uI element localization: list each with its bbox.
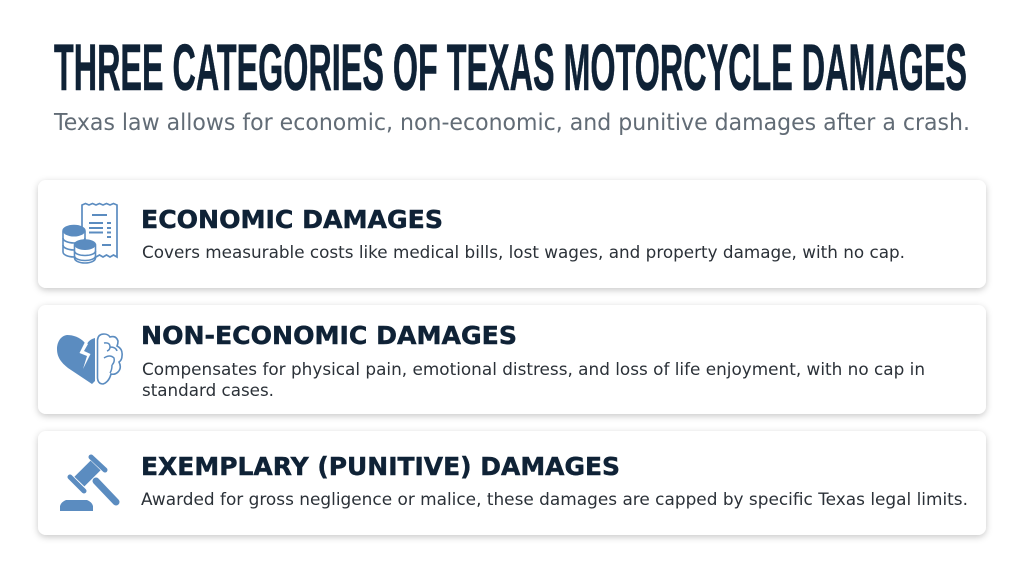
- subtitle: Texas law allows for economic, non-economic, and punitive damages after a crash.: [53, 108, 970, 136]
- panel: exemplary damages: [38, 431, 986, 535]
- text: economic description: Covers measurable costs like medical bills, lost wages, and property damage, with no cap.: [142, 243, 905, 263]
- heading: economic damages: ECONOMIC DAMAGES: [141, 205, 443, 234]
- icon: receipt and coins: [63, 204, 117, 263]
- panel: non-economic damages: [38, 305, 986, 414]
- icon: broken heart and brain: [57, 334, 122, 384]
- icon: gavel: [60, 457, 116, 511]
- heading: exemplary damages: EXEMPLARY (PUNITIVE) DAMAGES: [141, 452, 620, 481]
- text: non-economic description: standard cases.: [142, 381, 274, 401]
- text: non-economic description: Compensates for physical pain, emotional distress, and loss of life enjoyment, with no cap in: [142, 360, 925, 380]
- panel: economic damages: [38, 180, 986, 288]
- text: exemplary description: Awarded for gross negligence or malice, these damages are capped by specific Texas legal limits.: [141, 490, 968, 510]
- heading: non-economic damages: NON-ECONOMIC DAMAGES: [141, 321, 517, 350]
